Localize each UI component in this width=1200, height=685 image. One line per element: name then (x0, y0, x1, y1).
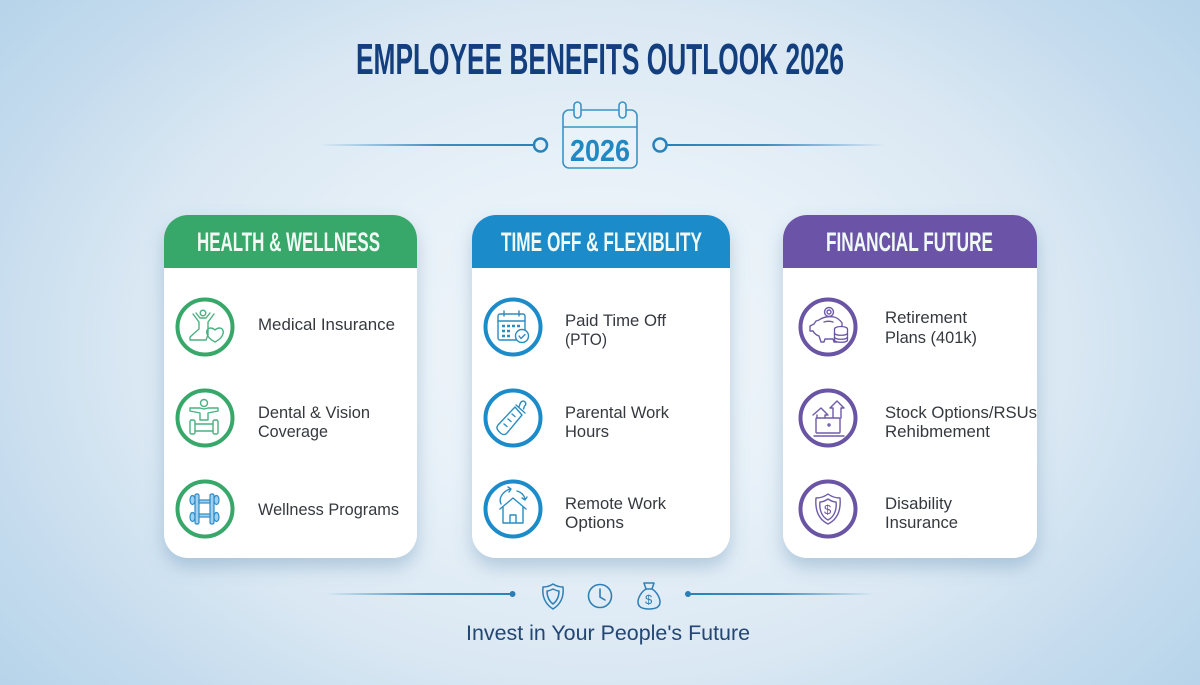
text: stock options: Rehibmement (885, 423, 990, 441)
text: dental and vision coverage: Coverage (258, 423, 328, 441)
tagline: Invest in Your People's Future (466, 622, 750, 645)
heading: financial future: FINANCIAL FUTURE (826, 227, 993, 257)
icon: shield with dollar (800, 482, 856, 536)
text: stock options (885, 404, 1037, 441)
icon: laptop with growth arrows (800, 390, 856, 446)
icon: calendar with check (486, 300, 540, 354)
text: wellness programs: Wellness Programs (258, 501, 399, 519)
text: paid time off: (PTO) (565, 331, 607, 349)
icon: money bag (638, 583, 660, 609)
icon: shield with dollar: $ (824, 502, 832, 517)
icon: calendar 2026: 2026 (570, 133, 630, 168)
heading: time off and flexibility: TIME OFF & FLEXIBLITY (501, 227, 702, 257)
panel: time off and flexibility (472, 215, 730, 558)
text: stock options: Stock Options/RSUs (885, 404, 1037, 422)
icon: shield (543, 584, 563, 609)
text: disability insurance (885, 495, 958, 532)
text: dental and vision coverage (258, 404, 370, 441)
divider with calendar icon (320, 102, 885, 168)
text: parental work hours (565, 404, 670, 441)
text: parental work hours: Hours (565, 423, 609, 441)
icon: dumbbells (178, 482, 232, 536)
panel: health and wellness (164, 215, 417, 558)
text: paid time off (565, 312, 666, 349)
text: remote work options: Remote Work (565, 495, 667, 513)
text: retirement plans: Plans (401k) (885, 329, 977, 347)
heading: health and wellness: HEALTH & WELLNESS (197, 227, 380, 257)
text: remote work options (565, 495, 667, 532)
text: dental and vision coverage: Dental & Vision (258, 404, 370, 422)
text: disability insurance: Insurance (885, 514, 958, 532)
icon: piggy bank (800, 300, 856, 354)
icon: person on bench (178, 390, 232, 446)
text: disability insurance: Disability (885, 495, 953, 513)
text: remote work options: Options (565, 514, 624, 532)
icon: baby bottle (486, 390, 540, 446)
text: retirement plans: Retirement (885, 309, 967, 327)
text: parental work hours: Parental Work (565, 404, 670, 422)
icon: clock (588, 584, 612, 608)
icon: calendar 2026 (563, 102, 637, 168)
footer divider with icons (325, 583, 875, 609)
text: retirement plans (885, 309, 977, 347)
panel: financial future (783, 215, 1037, 558)
icon: person with heart (178, 300, 232, 354)
text: medical insurance: Medical Insurance (258, 316, 395, 334)
title: EMPLOYEE BENEFITS OUTLOOK 2026 (356, 36, 844, 84)
text: paid time off: Paid Time Off (565, 312, 666, 330)
icon: home with arrows (486, 482, 540, 536)
icon: money bag: $ (645, 592, 653, 607)
